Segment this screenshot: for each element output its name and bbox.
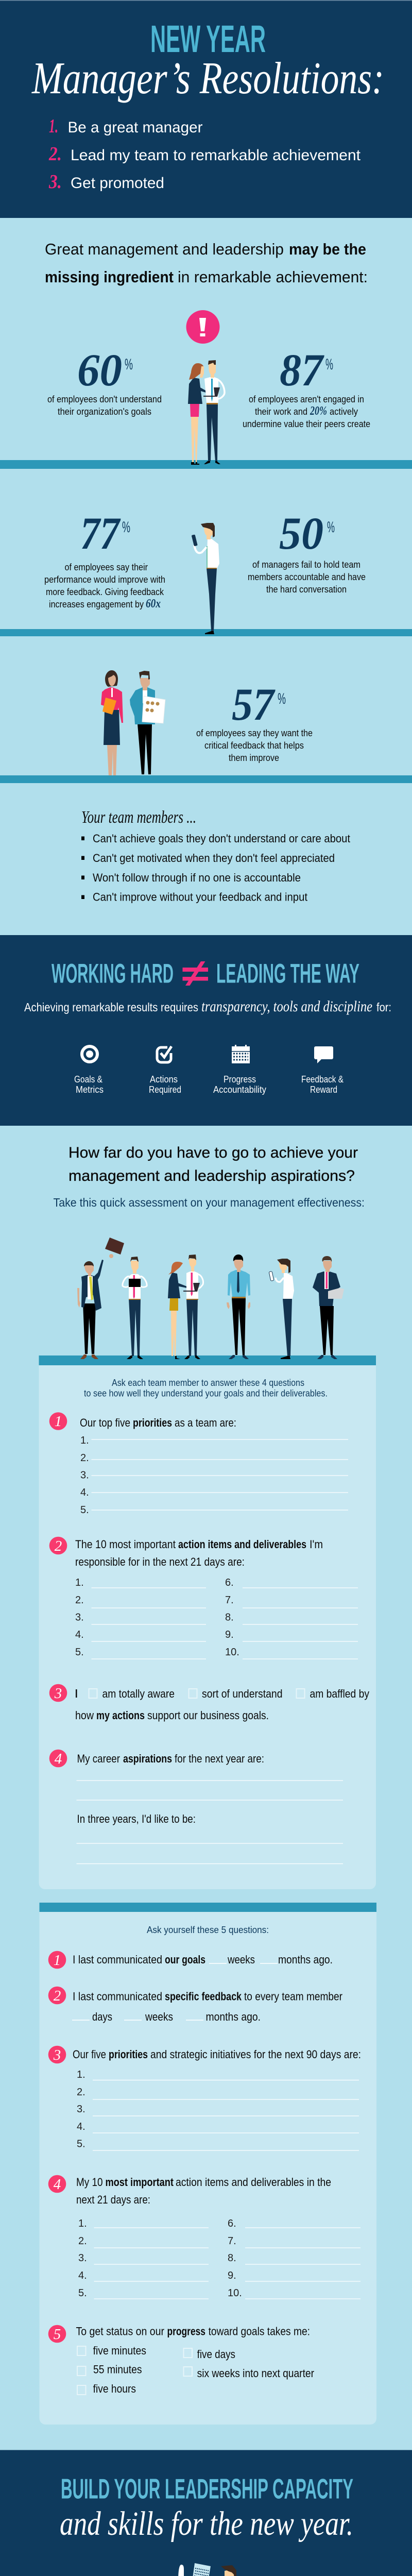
stat: 60 percent — [47, 345, 162, 417]
intro: team questions — [84, 1378, 328, 1398]
icon: exclamation badge — [186, 310, 219, 344]
question 2: feedback recency: days — [92, 2010, 112, 2023]
heading: how far — [68, 1144, 358, 1184]
number badge 2: 2 — [54, 1988, 61, 2004]
question 5: progress status: progress — [167, 2325, 205, 2338]
stat: 77 percent: more feedback. Giving feedback — [46, 587, 164, 597]
question 1: priorities: 3. — [80, 1469, 89, 1481]
question 4: career aspirations: In three years, I'd like to be: — [77, 1812, 196, 1825]
intro: self questions: Ask yourself these 5 questions: — [147, 1925, 269, 1935]
person 4 — [183, 1255, 203, 1359]
question 3: ninety day priorities: priorities — [109, 2048, 148, 2061]
question 1: priorities: as a team are: — [175, 1416, 236, 1429]
question 4: most important actions: 6. — [228, 2218, 236, 2229]
subheading: transparency tools discipline — [24, 998, 391, 1015]
question 3: ninety day priorities: 5. — [77, 2139, 85, 2150]
intro statement: missing ingredient — [45, 268, 174, 286]
question 1: priorities: 1. — [80, 1435, 89, 1446]
labels: four disciplines: Reward — [310, 1084, 337, 1095]
question 1: priorities: 4. — [80, 1487, 89, 1498]
stat: 87 percent: of employees aren't engaged in — [249, 394, 364, 404]
stat: 60 percent: 60 — [77, 345, 122, 396]
number badge 4: 4 — [54, 2176, 61, 2193]
labels: four disciplines: Required — [149, 1084, 181, 1095]
question 2: action items: 8. — [225, 1612, 234, 1623]
intro statement — [45, 240, 368, 286]
question 2: action items: 7. — [225, 1595, 234, 1606]
question 1: goals recency: I last communicated — [73, 1953, 162, 1966]
question 4: most important actions: 5. — [78, 2287, 87, 2299]
stat: 87 percent — [243, 345, 370, 429]
question 1: priorities: priorities — [133, 1416, 172, 1429]
heading: how far: How far do you have to go to achieve your — [68, 1144, 358, 1161]
question 4: most important actions: action items and deliverables in the — [176, 2176, 331, 2189]
question 4: most important actions: 1. — [78, 2218, 87, 2229]
labels: four disciplines: Metrics — [76, 1084, 104, 1095]
question 1: goals recency: our goals — [165, 1953, 205, 1966]
stat: 77 percent: increases engagement by — [49, 599, 144, 609]
intro statement: Great management and leadership — [45, 240, 284, 258]
question 5: progress status: five hours — [93, 2382, 136, 2395]
illustration: man at desk — [152, 2563, 252, 2576]
stat: 87 percent: 87 — [280, 345, 324, 396]
person 7 — [313, 1256, 344, 1359]
list: team member needs: Can't get motivated when they don't feel appreciated — [93, 852, 335, 865]
panel: header — [0, 0, 412, 218]
question 5: progress status — [48, 2325, 314, 2395]
number badge 1 — [49, 1412, 67, 1430]
question 3: my actions: my actions — [96, 1709, 145, 1722]
floor bar — [0, 775, 412, 783]
panel: self assessment card — [39, 1903, 376, 2425]
labels: four disciplines: Goals & — [74, 1074, 102, 1084]
illustration: man with phone — [192, 523, 219, 634]
subheading: assessment: Take this quick assessment on your management effectiveness: — [54, 1196, 365, 1209]
list: resolutions: Get promoted — [71, 175, 164, 192]
intro statement: may be the — [289, 240, 366, 258]
question 4: most important actions: 8. — [228, 2252, 236, 2264]
person 5 — [227, 1255, 250, 1359]
question 1: goals recency: months ago. — [278, 1953, 333, 1966]
question 2: feedback recency — [48, 1987, 342, 2023]
stat: 77 percent: 77 — [80, 509, 121, 559]
stat: 57 percent — [196, 680, 313, 763]
icon: feedback speech bubble — [314, 1046, 333, 1063]
question 4: career aspirations — [49, 1750, 343, 1864]
question 3: my actions: sort of understand — [202, 1687, 282, 1700]
panel: working hard vs leading — [0, 935, 412, 1126]
labels: four disciplines: Feedback & — [301, 1074, 344, 1084]
number badge 4 — [48, 2175, 66, 2193]
list: team member needs — [81, 832, 350, 904]
person 1 — [77, 1238, 124, 1359]
question 5: progress status: 55 minutes — [93, 2363, 142, 2376]
question 2: action items: 6. — [225, 1577, 234, 1588]
question 2: feedback recency: specific feedback — [165, 1990, 242, 2003]
list: team member needs: Won't follow through if no one is accountable — [93, 871, 301, 884]
person 6 — [269, 1259, 294, 1359]
list: resolutions: Be a great manager — [68, 119, 203, 136]
question 3: my actions — [49, 1684, 369, 1722]
stat: 87 percent: 20% — [310, 404, 327, 418]
question 3: my actions: support our business goals. — [147, 1709, 269, 1722]
stat: 50 percent: % — [327, 519, 335, 536]
list: resolutions: 3. — [48, 171, 62, 193]
list: resolutions: 2. — [48, 143, 62, 165]
question 4: most important actions: 3. — [78, 2252, 87, 2264]
stat: 50 percent — [248, 509, 366, 595]
icon: goals target — [82, 1046, 97, 1062]
heading: working hard: WORKING HARD — [52, 958, 174, 989]
question 4: career aspirations: aspirations — [123, 1752, 172, 1765]
question 5: progress status: five days — [197, 2348, 235, 2361]
question 4: most important actions: most important — [105, 2176, 174, 2189]
intro statement: in remarkable achievement: — [178, 268, 368, 286]
stat: 50 percent: 50 — [279, 509, 323, 559]
heading: how far: management and leadership aspirations? — [68, 1167, 355, 1184]
question 3: ninety day priorities: and strategic initiatives for the next 90 days are: — [150, 2048, 361, 2061]
list: team member needs: Can't improve without your feedback and input — [93, 890, 307, 904]
question 2: action items: The 10 most important — [75, 1538, 176, 1551]
question 4: most important actions: 2. — [78, 2235, 87, 2247]
number badge 2 — [49, 1537, 67, 1554]
stat: 77 percent: performance would improve with — [44, 574, 165, 585]
stat: 57 percent: 57 — [232, 680, 276, 730]
stat: 57 percent: them improve — [229, 753, 279, 763]
question 2: action items — [49, 1537, 358, 1659]
question 1: priorities: 2. — [80, 1452, 89, 1464]
number badge 4 — [49, 1750, 67, 1767]
question 2: action items: 1. — [75, 1577, 84, 1588]
list: resolutions — [48, 115, 361, 193]
question 2: action items: 3. — [75, 1612, 84, 1623]
number badge 5 — [48, 2325, 66, 2343]
question 2: action items: 4. — [75, 1629, 84, 1640]
question 4: most important actions: 7. — [228, 2235, 236, 2247]
question 2: action items: I'm — [310, 1538, 323, 1551]
labels: four disciplines: Accountability — [213, 1084, 266, 1095]
question 2: action items: action items and deliverables — [178, 1538, 306, 1551]
question 3: ninety day priorities: 3. — [77, 2104, 85, 2115]
question 2: action items: 2. — [75, 1595, 84, 1606]
question 1: priorities — [49, 1412, 348, 1516]
question 3: ninety day priorities: 1. — [77, 2069, 85, 2080]
labels: four disciplines — [74, 1074, 344, 1095]
question 5: progress status: toward goals takes me: — [209, 2325, 310, 2338]
question 2: action items: responsible for in the next 21 days are: — [75, 1555, 245, 1568]
question 4: most important actions — [48, 2175, 360, 2299]
stat: 87 percent: undermine value their peers create — [243, 419, 370, 429]
number badge 1 — [48, 1951, 66, 1969]
stat: 57 percent: % — [278, 690, 286, 707]
number badge 5: 5 — [54, 2326, 61, 2343]
question 2: feedback recency: months ago. — [206, 2010, 261, 2023]
stat: 57 percent: of employees say they want the — [196, 728, 313, 738]
question 3: ninety day priorities: 4. — [77, 2121, 85, 2132]
number badge 3 — [48, 2046, 66, 2063]
stat: 77 percent: % — [122, 519, 130, 536]
question 3: my actions: am baffled by — [310, 1687, 369, 1700]
question 3: my actions: how — [75, 1709, 94, 1722]
number badge 2 — [48, 1987, 66, 2004]
stat: 50 percent: the hard conversation — [266, 584, 347, 595]
labels: four disciplines: Actions — [150, 1074, 178, 1084]
stat: 50 percent: members accountable and have — [248, 572, 366, 582]
illustration: woman and man with laptop — [188, 360, 225, 465]
stat: 60 percent: % — [125, 356, 133, 373]
stat: 77 percent: 60x — [146, 597, 161, 611]
panel: team assessment card — [39, 1238, 376, 1889]
title: new year: NEW YEAR — [150, 18, 266, 60]
stat: 77 percent — [44, 509, 165, 611]
question 2: action items: 10. — [225, 1647, 239, 1658]
question 2: action items: 5. — [75, 1647, 84, 1658]
number badge 1: 1 — [55, 1413, 62, 1430]
number badge 2: 2 — [55, 1538, 62, 1554]
icon: actions check — [157, 1046, 171, 1062]
intro: team questions: Ask each team member to answer these 4 questions — [112, 1378, 304, 1388]
illustration: group of seven professionals — [77, 1238, 344, 1359]
number badge 3: 3 — [54, 1685, 62, 1702]
stat: 87 percent: actively — [330, 406, 358, 417]
question 1: priorities: Our top five — [80, 1416, 130, 1429]
question 5: progress status: To get status on our — [76, 2325, 164, 2338]
question 1: priorities: 5. — [80, 1504, 89, 1516]
list: resolutions: 1. — [49, 115, 58, 137]
question 2: feedback recency: weeks — [145, 2010, 173, 2023]
person 3 — [168, 1262, 187, 1359]
question 5: progress status: five minutes — [93, 2344, 146, 2357]
floor bar — [0, 629, 412, 636]
question 4: most important actions: My 10 — [76, 2176, 103, 2189]
stat: 60 percent: their organization's goals — [58, 406, 151, 417]
number badge 1: 1 — [54, 1952, 61, 1969]
heading: your team members: Your team members ... — [81, 808, 196, 827]
question 4: most important actions: 4. — [78, 2270, 87, 2281]
floor bar — [0, 460, 412, 469]
question 3: my actions: am totally aware — [102, 1687, 175, 1700]
question 4: most important actions: 10. — [228, 2287, 242, 2299]
number badge 3 — [49, 1684, 67, 1702]
number badge 3: 3 — [53, 2047, 61, 2063]
stat: 57 percent: critical feedback that helps — [204, 740, 304, 751]
question 4: career aspirations: My career — [77, 1752, 120, 1765]
question 2: action items: 9. — [225, 1629, 234, 1640]
question 2: feedback recency: I last communicated — [73, 1990, 162, 2003]
stat: 87 percent: % — [325, 356, 333, 373]
illustration: woman and man with rating board — [101, 670, 165, 781]
subheading: transparency tools discipline: Achieving remarkable results requires — [24, 1001, 198, 1014]
stat: 87 percent: their work and — [255, 406, 307, 417]
list: team member needs: Can't achieve goals they don't understand or care about — [93, 832, 350, 845]
question 2: feedback recency: to every team member — [244, 1990, 342, 2003]
subheading: transparency tools discipline: for: — [376, 1001, 391, 1014]
question 1: goals recency: weeks — [227, 1953, 255, 1966]
question 3: ninety day priorities: Our five — [73, 2048, 106, 2061]
list: resolutions: Lead my team to remarkable achievement — [71, 147, 361, 164]
question 3: ninety day priorities — [48, 2046, 361, 2150]
stat: 50 percent: of managers fail to hold team — [252, 560, 360, 570]
panel: build leadership capacity — [0, 2450, 412, 2576]
question 1: goals recency — [48, 1951, 333, 1969]
stat: 60 percent: of employees don't understand — [47, 394, 162, 404]
labels: four disciplines: Progress — [224, 1074, 256, 1084]
subheading: transparency tools discipline: transparency, tools and discipline — [201, 998, 372, 1015]
intro: team questions: to see how well they understand your goals and their deliverables. — [84, 1388, 328, 1398]
person 2 — [123, 1257, 147, 1359]
stat: 77 percent: of employees say their — [65, 562, 148, 572]
number badge 4: 4 — [55, 1751, 62, 1767]
question 4: career aspirations: for the next year are: — [175, 1752, 264, 1765]
question 4: most important actions: 9. — [228, 2270, 236, 2281]
question 3: ninety day priorities: 2. — [77, 2087, 85, 2098]
icon: not equal — [182, 961, 208, 986]
icon: progress calendar — [232, 1045, 250, 1063]
question 4: most important actions: next 21 days are: — [76, 2193, 150, 2206]
question 5: progress status: six weeks into next quarter — [197, 2367, 314, 2380]
